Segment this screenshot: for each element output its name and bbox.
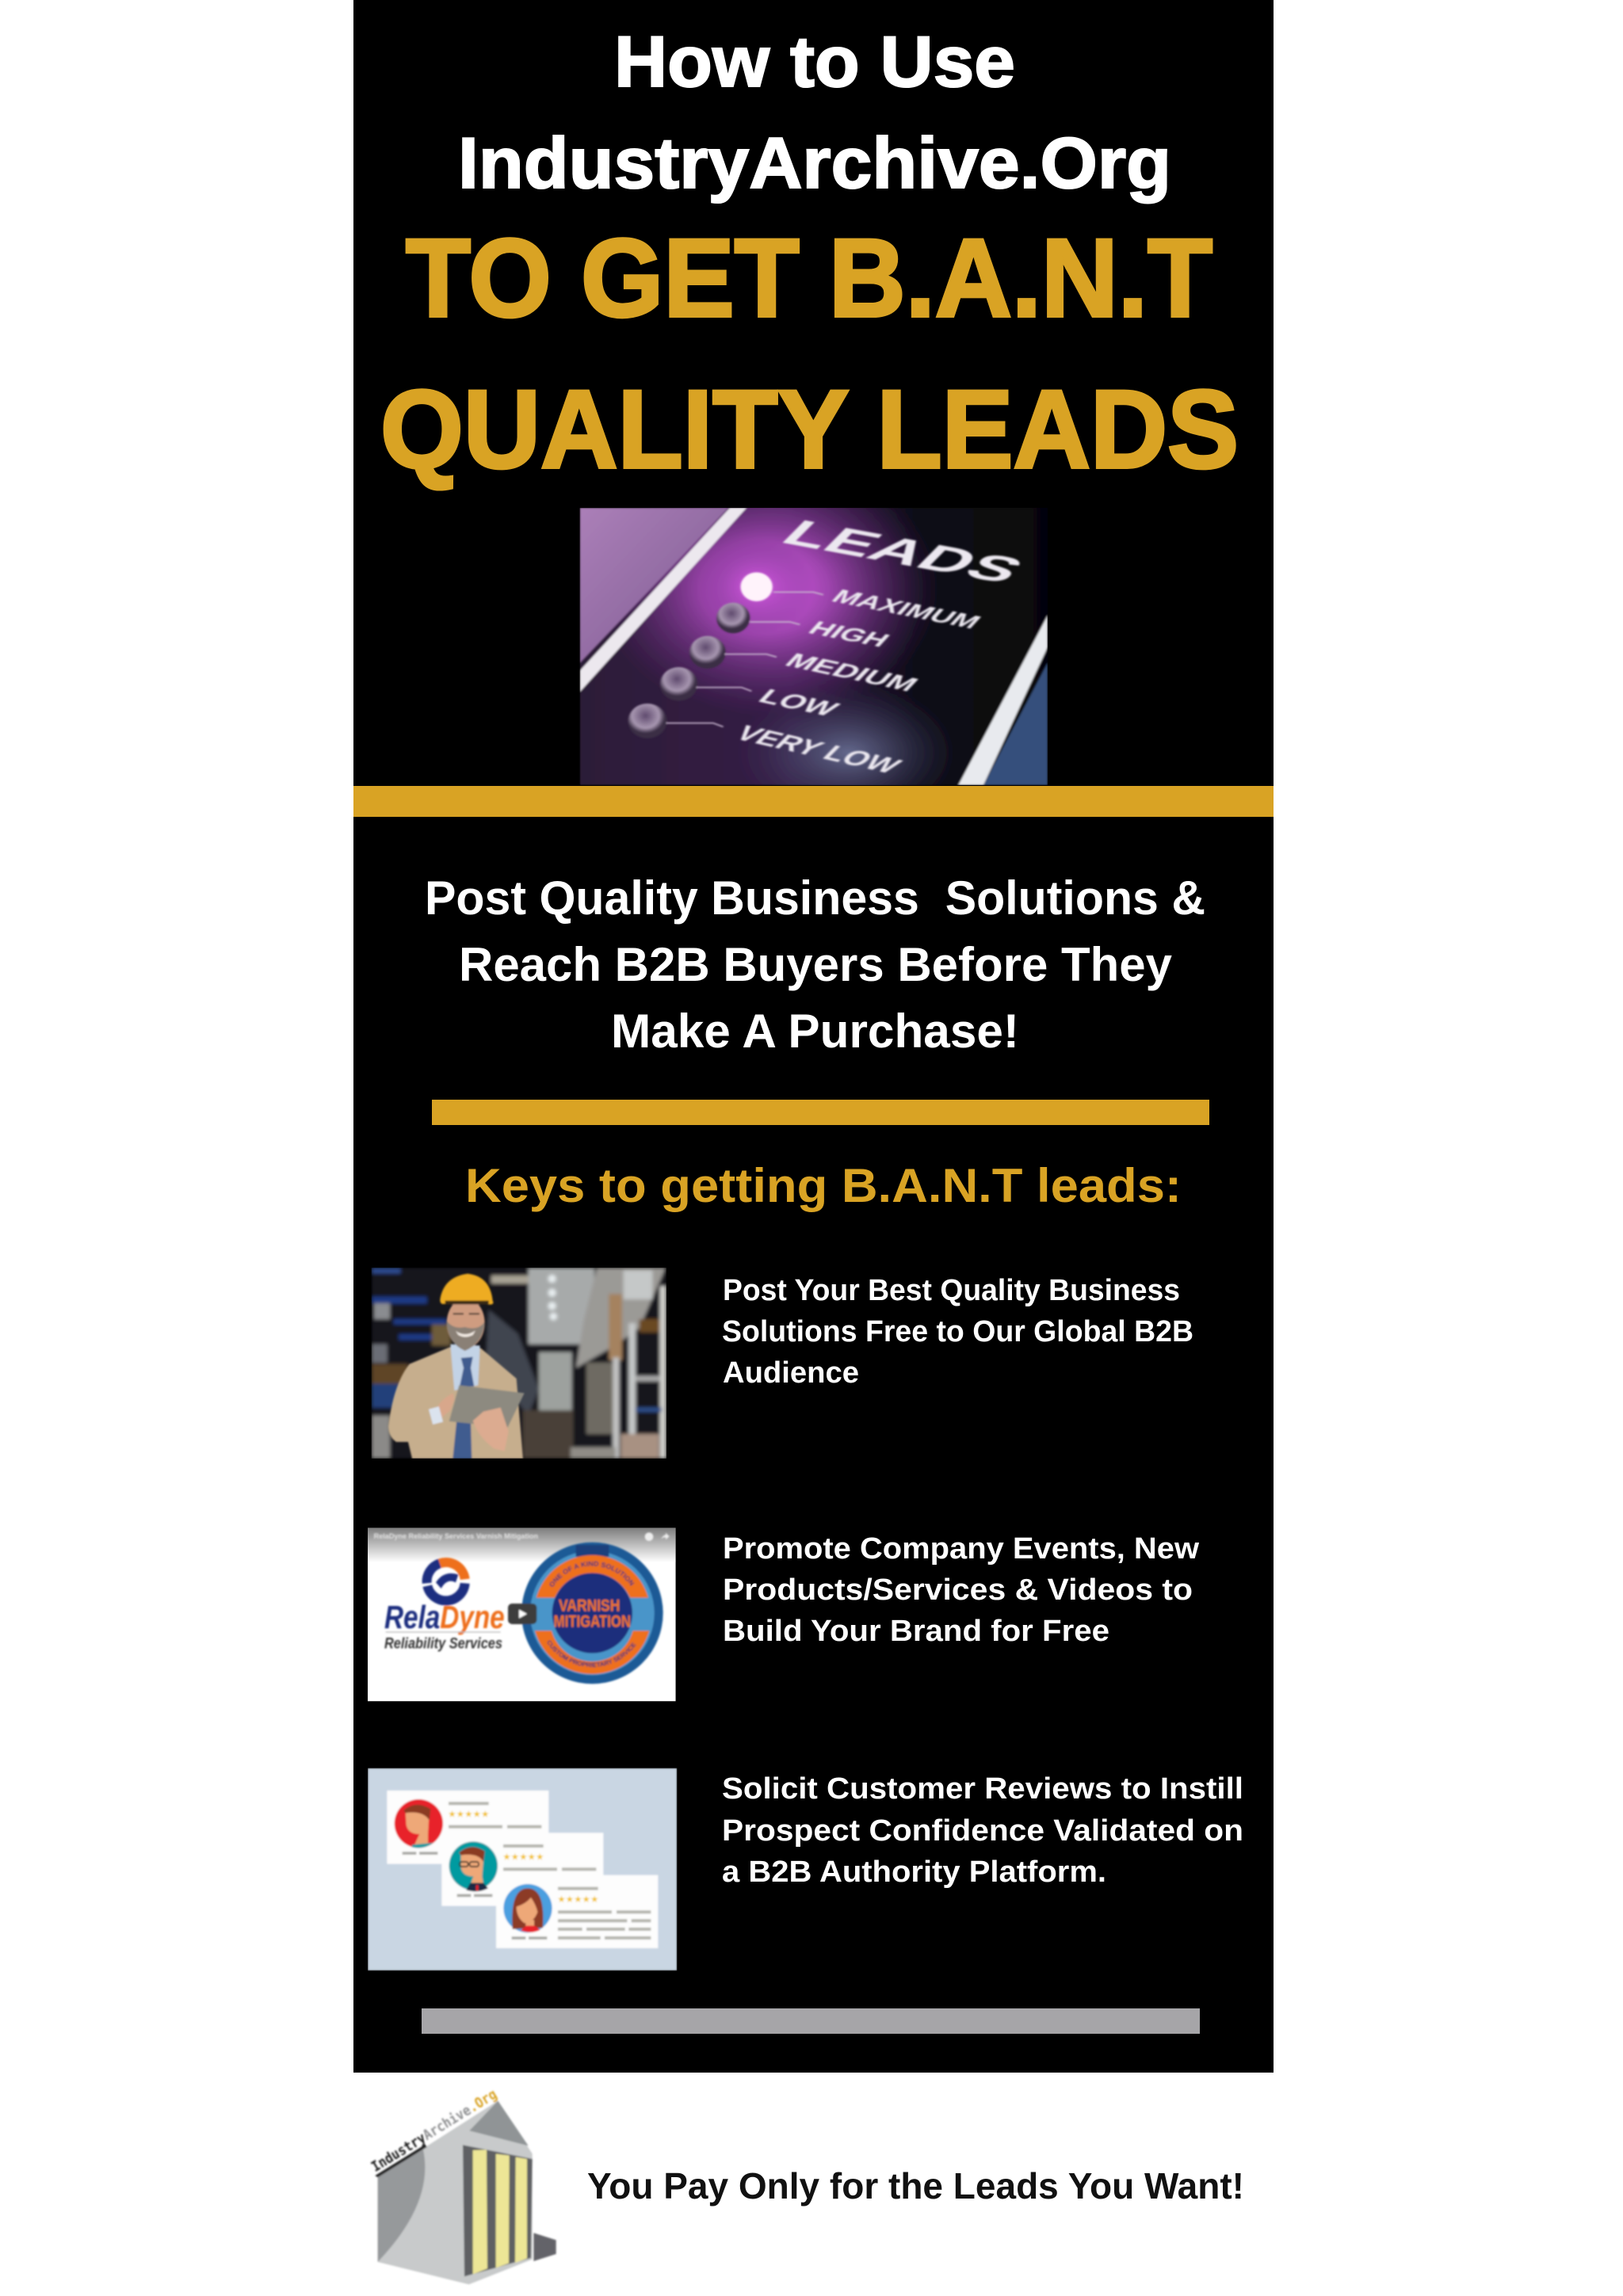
- item 2 text: Promote Company Events, New: [723, 1532, 1199, 1566]
- title: How to Use IndustryArchive.Org: How to Use: [614, 22, 1015, 102]
- gold band: [353, 786, 1274, 817]
- video icons: [645, 1532, 653, 1541]
- head: [447, 1298, 485, 1348]
- subheading: post quality business solutions: [425, 871, 1205, 1058]
- thumbnail: RelaDyne video: MITIGATION: [554, 1611, 631, 1630]
- LED knobs: [628, 572, 823, 738]
- hard hat: [440, 1274, 493, 1305]
- thumbnail: RelaDyne video: CUSTOM PROPRIETARY SERVICE: [546, 1639, 637, 1669]
- black main panel: [353, 0, 1274, 2073]
- infographic canvas: [353, 0, 1274, 2285]
- tie: [460, 1357, 474, 1386]
- review card 2: ★★★★★: [503, 1853, 544, 1862]
- jacket: [388, 1347, 523, 1459]
- swirl logo: [427, 1562, 465, 1600]
- item 1 text: Solutions Free to Our Global B2B: [722, 1315, 1193, 1348]
- dial labels: LOW: [753, 685, 845, 720]
- logo: IndustryArchive.Org building: IndustryArchive.Org: [369, 2086, 500, 2176]
- item 2 text: [723, 1532, 1199, 1648]
- review card 1: [387, 1791, 548, 1864]
- item 2 text: Build Your Brand for Free: [723, 1615, 1109, 1648]
- gray divider bar: [422, 2008, 1200, 2034]
- thumbnail: RelaDyne video: [368, 1527, 676, 1702]
- tablet: [449, 1385, 525, 1428]
- headline: TO GET B.A.N.T QUALITY LEADS: QUALITY LEADS: [380, 367, 1239, 491]
- thumbnail: RelaDyne video: ONE OF A KIND SOLUTION: [548, 1560, 636, 1588]
- dial labels: MAXIMUM: [827, 586, 986, 633]
- item 1 text: [722, 1274, 1193, 1390]
- gold divider bar: [432, 1100, 1209, 1125]
- thumbnail: RelaDyne video: VARNISH: [559, 1596, 620, 1615]
- varnish badge: [521, 1543, 663, 1684]
- dial labels: MEDIUM: [780, 649, 924, 696]
- item 3 text: [722, 1772, 1243, 1889]
- item 3 text: a B2B Authority Platform.: [722, 1855, 1106, 1889]
- illustration: customer reviews: [368, 1768, 677, 1970]
- dial labels: [740, 519, 1021, 773]
- item 1 text: Post Your Best Quality Business: [723, 1274, 1180, 1307]
- item 2 text: Products/Services & Videos to: [723, 1573, 1193, 1607]
- tagline: You Pay Only for the Leads You Want!: [587, 2165, 1244, 2206]
- dial labels: HIGH: [803, 618, 895, 651]
- subheading: post quality business solutions: Post Quality Business Solutions &: [425, 871, 1205, 925]
- subheading: post quality business solutions: Make A Purchase!: [611, 1005, 1019, 1058]
- shirt: [450, 1344, 480, 1390]
- title: How to Use IndustryArchive.Org: [458, 22, 1171, 204]
- item 1 text: Audience: [723, 1356, 859, 1390]
- play button: [508, 1604, 537, 1624]
- review card 3: ★★★★★: [558, 1895, 598, 1904]
- subheading: post quality business solutions: Reach B2B Buyers Before They: [459, 938, 1173, 991]
- headline: TO GET B.A.N.T QUALITY LEADS: [380, 215, 1239, 491]
- photo: leads dial: [580, 508, 1048, 785]
- item 3 text: Solicit Customer Reviews to Instill: [722, 1772, 1243, 1806]
- item 3 text: Prospect Confidence Validated on: [722, 1814, 1243, 1848]
- hands: [438, 1394, 455, 1417]
- thumbnail: RelaDyne video: RelaDyne Reliability Services Varnish Mitigation: [374, 1532, 538, 1540]
- dial labels: LEADS: [771, 513, 1034, 591]
- review card 3: [496, 1875, 658, 1948]
- thumbnail: RelaDyne video: Reliability Services: [384, 1636, 502, 1653]
- heading: keys to getting B.A.N.T leads: Keys to getting B.A.N.T leads:: [465, 1159, 1182, 1212]
- headline: TO GET B.A.N.T QUALITY LEADS: TO GET B.A.N.T: [406, 215, 1212, 340]
- logo: IndustryArchive.Org building: [369, 2086, 556, 2284]
- review card 1: ★★★★★: [449, 1810, 489, 1819]
- review card 2: [441, 1833, 603, 1906]
- dial labels: VERY LOW: [729, 722, 907, 778]
- title: How to Use IndustryArchive.Org: IndustryArchive.Org: [458, 124, 1171, 204]
- photo: man with tablet in warehouse: [372, 1268, 666, 1459]
- thumbnail: RelaDyne video: RelaDyne: [384, 1599, 505, 1635]
